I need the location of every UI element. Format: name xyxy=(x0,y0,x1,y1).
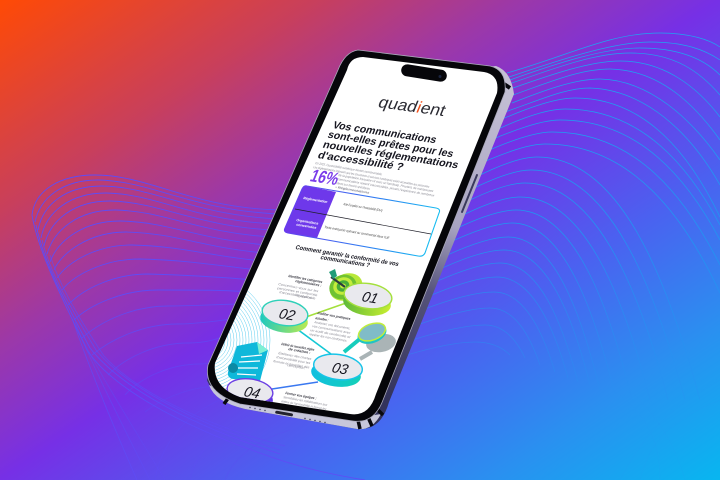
table divider xyxy=(295,209,431,234)
node 02: 02 xyxy=(277,306,297,324)
title xyxy=(318,121,458,170)
node 02 xyxy=(260,300,308,333)
logo: quadient xyxy=(375,94,449,120)
background waves: left contour mesh xyxy=(32,175,365,480)
step text 1: réglementaires : xyxy=(295,279,322,288)
phone bezel xyxy=(207,50,505,421)
magnifier handle xyxy=(344,338,361,352)
step text 3: de création : xyxy=(288,347,311,355)
phone bottom edge xyxy=(209,385,381,429)
phone antenna bands xyxy=(224,84,510,429)
step text 3: d'accessibilité pour les xyxy=(276,355,312,365)
row label: organisations: concernées xyxy=(296,223,317,230)
phone side button xyxy=(462,175,477,212)
decorative arcs xyxy=(214,290,270,396)
step text 4: enjeux de l'accessibilité et formez-les xyxy=(281,399,328,411)
phone metal frame xyxy=(207,66,514,429)
intro paragraph: Les réglementations imposent que les documents et services numériques soient accessibles aux personnes xyxy=(313,165,431,189)
step text 3: formats et garanties dès xyxy=(273,359,311,370)
step text 1: d'accessibilité applicable xyxy=(279,290,316,300)
step text 2: repérer les non-conformes. xyxy=(309,332,348,343)
row text 1: Acte Européen sur l'Accessibilité (EAA) xyxy=(343,202,383,213)
node 04 xyxy=(226,378,274,402)
phone camera xyxy=(438,75,442,78)
step text 4: Former vos équipes : xyxy=(285,391,317,401)
row label: organisations xyxy=(296,218,318,229)
magnifier lens xyxy=(358,328,386,344)
step text 2: vos communications avec xyxy=(312,324,352,335)
intro paragraph: communications restent inaccessibles, privant l'expérience de nombreux xyxy=(337,177,436,198)
phone speaker dots xyxy=(249,407,326,423)
step text 4: aux bonnes pratiques numériques. xyxy=(279,403,324,415)
step text 1 xyxy=(277,274,323,300)
stat 16%: 16% xyxy=(307,166,342,189)
step text 3: Définir de nouvelles règles xyxy=(281,342,315,352)
connector lines xyxy=(272,303,346,389)
step text 4 xyxy=(281,392,328,410)
subheading: Comment garantir la conformité de vos xyxy=(294,245,400,268)
screen content xyxy=(214,99,458,410)
subheading: communications ? xyxy=(319,255,371,269)
step text 3 xyxy=(273,342,315,370)
node 03 xyxy=(311,353,363,387)
title: sont-elles prêtes pour les xyxy=(326,130,455,160)
node 01 xyxy=(343,282,393,316)
intro paragraph: clients aux besoins spécifiques. xyxy=(336,181,371,191)
background waves: right contour arcs xyxy=(407,33,720,480)
intro paragraph: • Réglementations xyxy=(335,185,370,195)
step text 2: Analysez vos documents, xyxy=(314,320,351,330)
step text 2: un audit de conformité et xyxy=(310,328,351,339)
row text 2: Toute entreprise opérant au commercial dans l'UE xyxy=(324,225,391,240)
magnifier shadow xyxy=(366,334,396,352)
intro paragraph: En 2025, l'accessibilité numérique devient incontournable. xyxy=(315,161,383,176)
icon: target xyxy=(329,269,362,301)
dart xyxy=(331,277,345,287)
icon: document xyxy=(228,342,268,381)
node 01: 01 xyxy=(360,289,380,307)
row label: organisations: Organisations xyxy=(296,218,319,226)
step text 2: actuelles : xyxy=(315,316,329,322)
table panel xyxy=(284,186,440,256)
intro paragraph xyxy=(313,161,436,198)
step text 1: personnes et conformité xyxy=(277,286,318,297)
table purple column xyxy=(284,186,336,238)
node 03: 03 xyxy=(330,360,350,378)
phone screen xyxy=(215,57,497,414)
step text 3: conception. xyxy=(287,363,306,370)
phone notch xyxy=(400,63,448,83)
title: nouvelles réglementations xyxy=(321,140,460,171)
step text 1: Concentrez-vous sur les xyxy=(278,282,320,293)
node 04: 04 xyxy=(242,384,262,402)
intro paragraph: de la population française vit avec un handicap. Pourtant, de nombreuses xyxy=(338,173,435,193)
title: d'accessibilité ? xyxy=(316,150,405,173)
table outline xyxy=(284,186,440,256)
phone xyxy=(207,50,514,429)
step text 2 xyxy=(309,311,352,343)
icon: magnifier xyxy=(344,320,397,359)
title: Vos communications xyxy=(331,120,438,146)
phone charging port xyxy=(275,410,293,417)
step text 4: Sensibilisez les collaborateurs aux xyxy=(283,395,329,407)
step text 3: Établissez des chartes xyxy=(278,350,313,361)
step text 2: Auditer vos pratiques xyxy=(317,311,351,321)
step text 1: régulation. xyxy=(295,293,313,300)
row label: réglementation: Réglementation xyxy=(303,196,328,204)
step text 1: Identifier les catégories xyxy=(288,274,323,284)
